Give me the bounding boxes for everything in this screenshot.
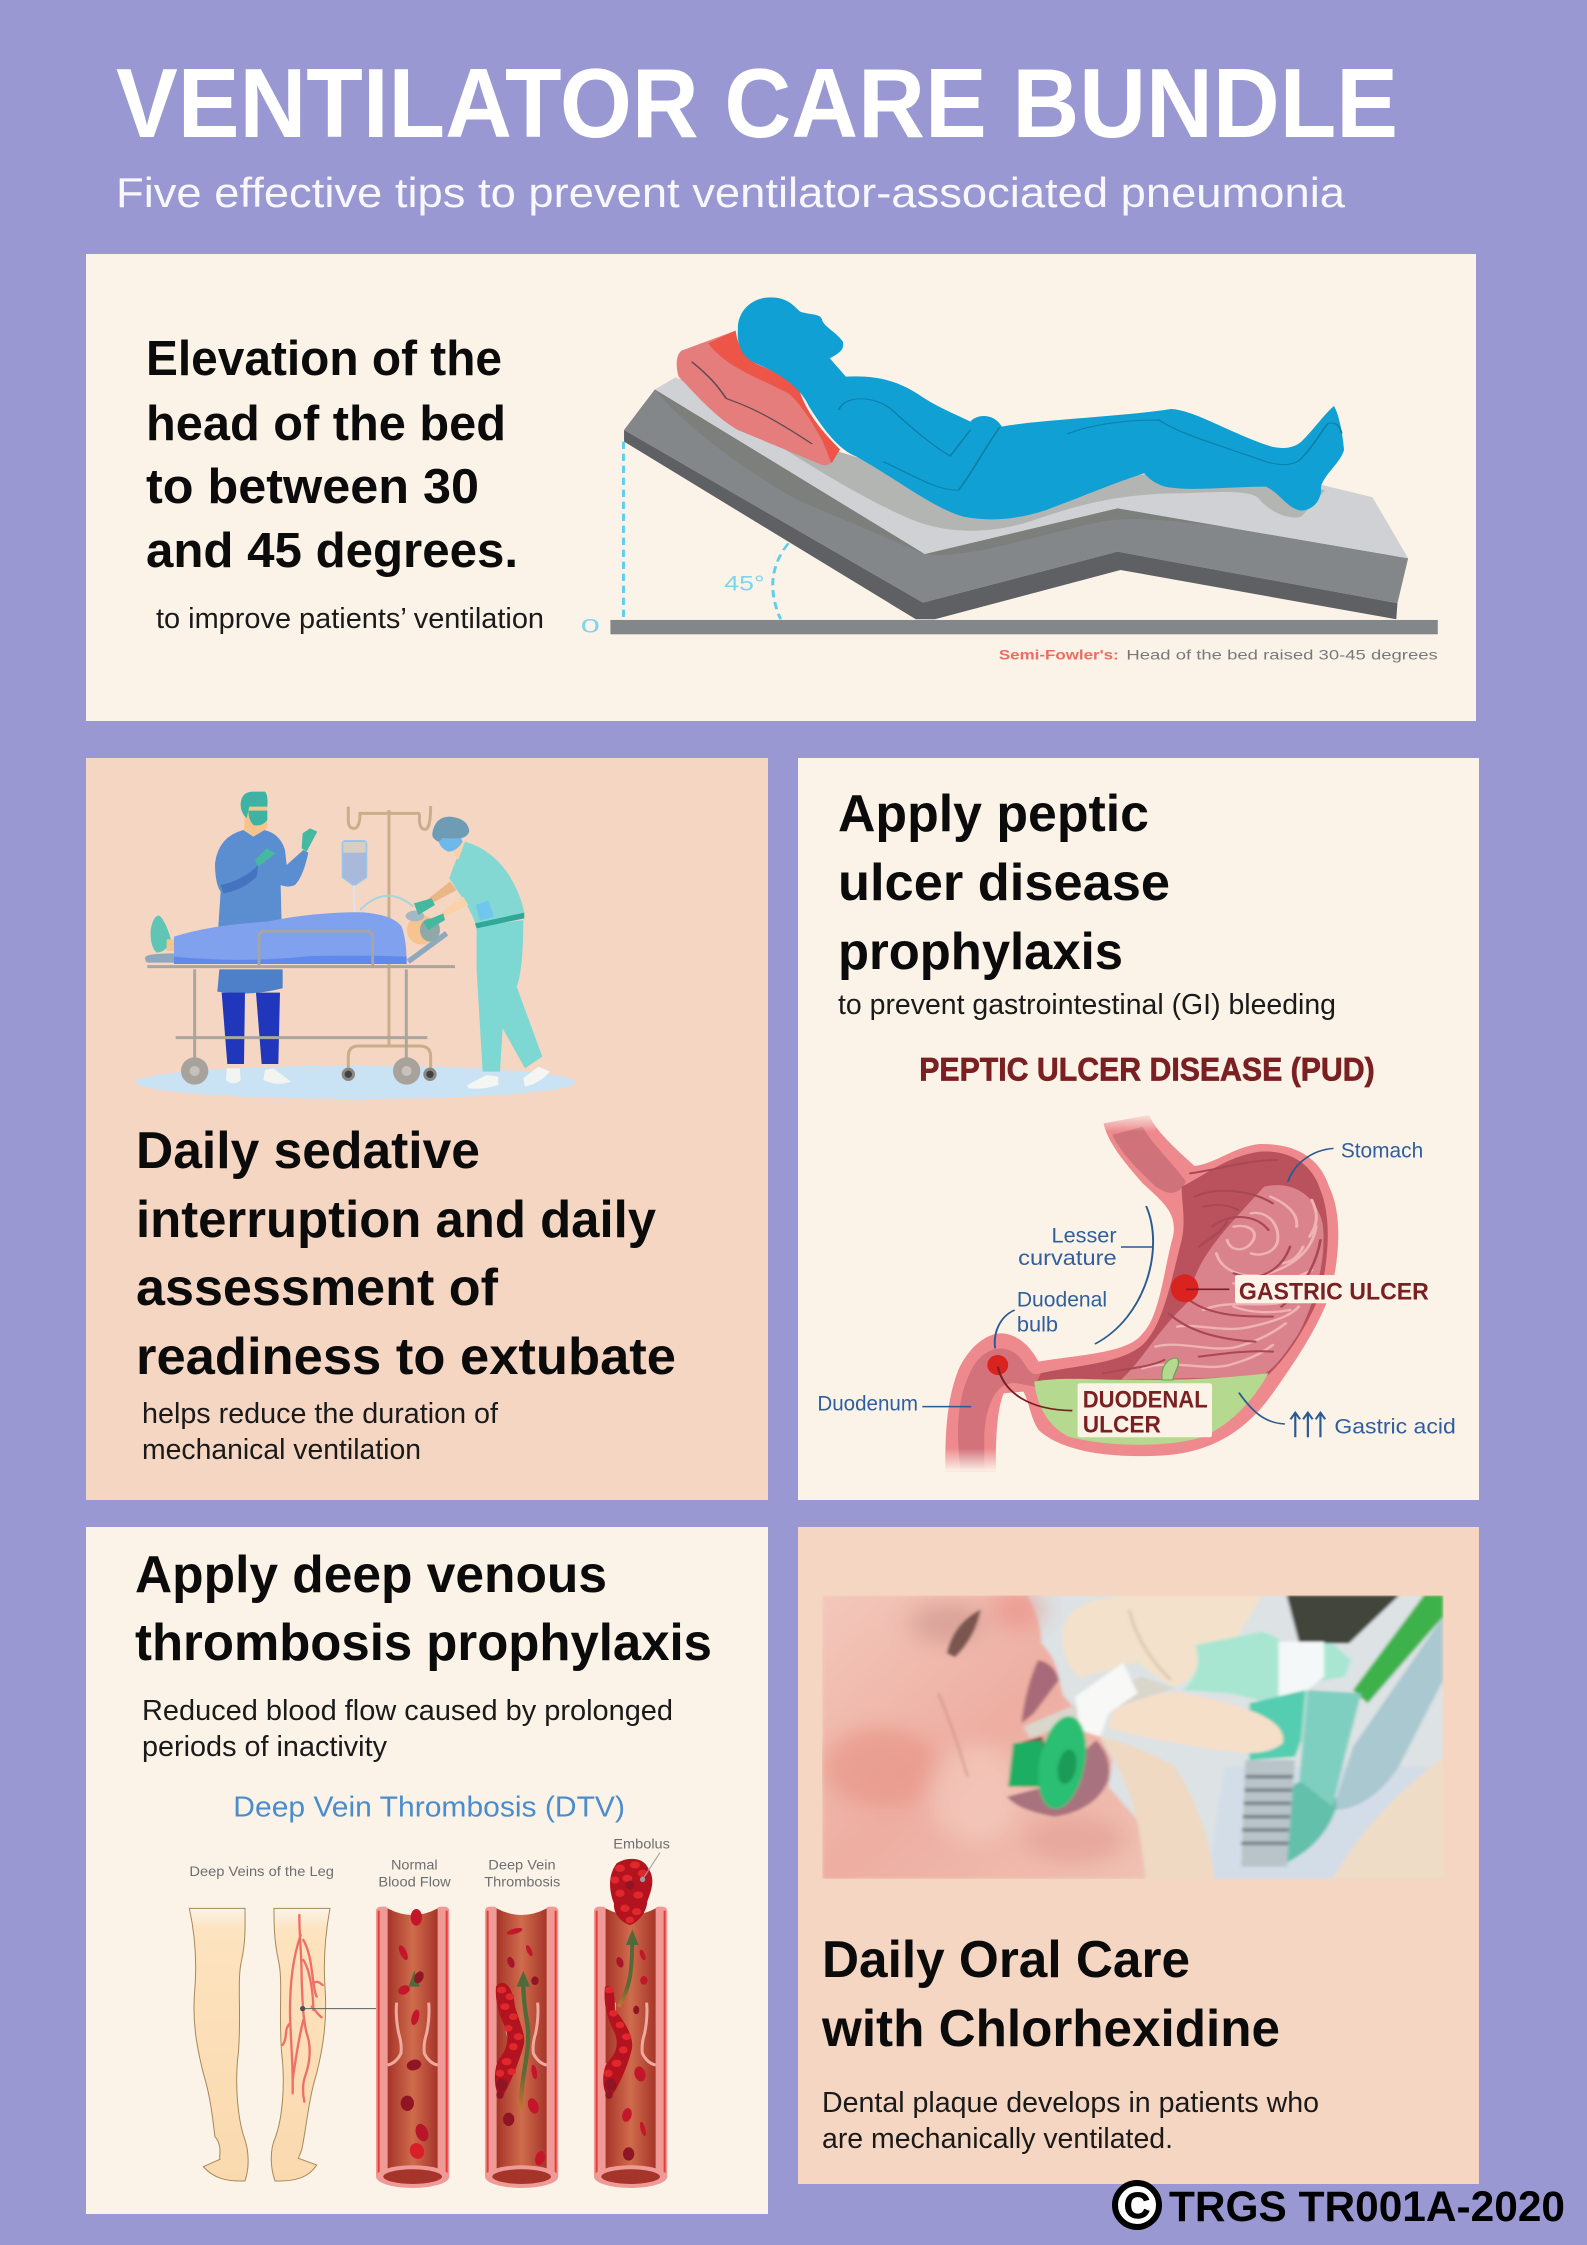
illustration: semi-Fowler bed — [581, 297, 1438, 663]
arrows: increased acid — [1291, 1413, 1325, 1437]
nurse — [414, 817, 550, 1089]
column labels: Deep Vein — [488, 1856, 556, 1872]
gastric ulcer spot — [1171, 1274, 1199, 1302]
heading: Apply deep venous — [135, 1546, 607, 1604]
supporting text — [142, 1695, 673, 1763]
lips — [1021, 1660, 1059, 1723]
panel: head of bed elevation — [86, 254, 1476, 721]
panel background — [86, 254, 1476, 721]
supporting text: mechanical ventilation — [142, 1434, 421, 1466]
caption — [999, 648, 1438, 663]
embolus mass — [610, 1859, 652, 1925]
heading: Apply peptic — [838, 785, 1149, 843]
duodenal ulcer label: DUODENAL — [1083, 1386, 1208, 1413]
heading: Elevation of the — [146, 332, 502, 386]
supporting text: Dental plaque develops in patients who — [822, 2087, 1319, 2119]
copyright footer — [1115, 2183, 1565, 2231]
anatomy labels: Duodenum — [817, 1393, 918, 1416]
dashed height and angle guides — [623, 442, 788, 619]
stretcher with patient — [145, 911, 455, 1085]
icon: copyright circle: C — [1124, 2185, 1150, 2226]
illustration title: PEPTIC ULCER DISEASE (PUD) — [919, 1052, 1375, 1088]
anatomy labels: Lesser — [1052, 1225, 1117, 1248]
angle label: 45° — [724, 571, 765, 595]
heading: head of the bed — [146, 397, 506, 451]
callout line — [303, 2007, 381, 2010]
clot — [495, 1983, 524, 2098]
IV bag — [342, 841, 367, 912]
photo background — [1028, 1596, 1444, 1854]
patient silhouette — [738, 297, 1344, 519]
anatomy labels: bulb — [1017, 1314, 1058, 1337]
illustration: clinicians at patient bedside — [136, 792, 576, 1099]
heading: prophylaxis — [838, 923, 1123, 981]
gloved hands — [1062, 1596, 1262, 1687]
endotracheal tube — [1024, 1677, 1175, 1738]
pillow — [677, 331, 840, 465]
panel background — [86, 1527, 768, 2214]
supporting text: to prevent gastrointestinal (GI) bleeding — [838, 989, 1336, 1021]
photo: oral care with ventilator tube — [822, 1590, 1443, 1879]
duodenal ulcer label — [998, 1367, 1212, 1438]
duodenal ulcer label: ULCER — [1083, 1411, 1161, 1438]
column labels: Embolus — [613, 1835, 670, 1851]
illustration: stomach with ulcers — [817, 1052, 1456, 1472]
title: VENTILATOR CARE BUNDLE — [116, 48, 1398, 158]
supporting text: helps reduce the duration of — [142, 1398, 499, 1430]
clear hose — [1332, 1617, 1443, 1810]
panel: deep venous thrombosis prophylaxis — [86, 1527, 768, 2214]
body shadow — [679, 378, 1325, 531]
gauze — [1075, 1663, 1138, 1737]
anatomy callout lines — [922, 1148, 1333, 1424]
finger over tube — [1109, 1692, 1283, 1753]
left leg — [189, 1908, 248, 2181]
corrugated tube — [1241, 1760, 1295, 1867]
supporting text — [142, 1398, 499, 1466]
mattress underside — [624, 430, 1397, 619]
esophagus lining — [1112, 1127, 1186, 1193]
heading: readiness to extubate — [136, 1328, 676, 1386]
stomach wall — [945, 1115, 1338, 1472]
mattress top — [655, 377, 1408, 558]
anatomy labels — [817, 1139, 1456, 1438]
heading: with Chlorhexidine — [821, 2000, 1280, 2058]
document code: TRGS TR001A-2020 — [1169, 2183, 1565, 2231]
supporting text — [822, 2087, 1319, 2155]
heading: to between 30 — [146, 460, 479, 514]
column labels: Deep Veins of the Leg — [189, 1863, 334, 1879]
gastric ulcer label — [1186, 1275, 1429, 1304]
heading: Daily sedative — [136, 1122, 480, 1180]
gastric acid pool — [1034, 1373, 1268, 1445]
column labels: Thrombosis — [484, 1874, 560, 1890]
heading: and 45 degrees. — [146, 524, 518, 578]
heading — [821, 1931, 1280, 2058]
heading — [146, 332, 518, 578]
panel: daily sedative interruption — [86, 758, 768, 1500]
green corrugated hose — [1353, 1596, 1443, 1703]
duodenum lining — [958, 1349, 1041, 1470]
heading: thrombosis prophylaxis — [135, 1614, 712, 1672]
lighter mucosa — [1121, 1185, 1324, 1380]
heading: ulcer disease — [838, 854, 1170, 912]
floor pad — [136, 1066, 576, 1099]
column labels — [189, 1835, 670, 1890]
panel background — [798, 1527, 1479, 2184]
anatomy labels: Duodenal — [1017, 1289, 1107, 1312]
anatomy labels: curvature — [1018, 1247, 1117, 1270]
panel background — [86, 758, 768, 1500]
anatomy labels: Gastric acid — [1334, 1415, 1456, 1438]
column labels: Blood Flow — [378, 1874, 452, 1890]
teal connector — [1183, 1632, 1351, 1760]
heading: Daily Oral Care — [822, 1931, 1190, 1989]
nasolabial crease — [939, 1693, 968, 1777]
bed base — [610, 620, 1438, 634]
panel background — [798, 758, 1479, 1500]
IV pole — [348, 806, 431, 1072]
gastric folds — [1143, 1197, 1316, 1368]
illustration title: Deep Vein Thrombosis (DTV) — [233, 1792, 625, 1824]
zero label: 0 — [581, 615, 600, 637]
anatomy labels: Stomach — [1341, 1139, 1423, 1162]
supporting text: Reduced blood flow caused by prolonged — [142, 1695, 673, 1727]
mattress side — [624, 389, 1408, 603]
vein: normal blood flow — [376, 1907, 449, 2188]
doctor — [215, 792, 317, 1084]
panel: daily oral care — [798, 1527, 1479, 2184]
panel: peptic ulcer prophylaxis — [798, 758, 1479, 1500]
column labels: Normal — [391, 1856, 438, 1872]
heading: assessment of — [136, 1259, 499, 1317]
right leg with veins — [271, 1908, 330, 2181]
vein: embolus — [594, 1853, 667, 2188]
stomach lining — [1034, 1152, 1328, 1387]
caption: Head of the bed raised 30-45 degrees — [1126, 648, 1438, 663]
green bite block — [1008, 1740, 1042, 1787]
tube end fades — [1099, 1112, 1156, 1132]
nostril — [947, 1609, 981, 1657]
supporting text: are mechanically ventilated. — [822, 2123, 1173, 2155]
heading — [136, 1122, 676, 1386]
caption: Semi-Fowler's: — [999, 648, 1119, 663]
patient face — [822, 1596, 1146, 1879]
illustration: deep vein thrombosis — [189, 1792, 670, 2188]
gastric ulcer label: GASTRIC ULCER — [1239, 1278, 1429, 1304]
subtitle: Five effective tips to prevent ventilator-associated pneumonia — [116, 169, 1346, 216]
supporting text: periods of inactivity — [142, 1731, 387, 1763]
supporting text: to improve patients’ ventilation — [156, 603, 544, 635]
duodenal ulcer spot — [987, 1355, 1008, 1375]
heading — [135, 1546, 712, 1672]
clot — [603, 1986, 632, 2098]
heading — [838, 785, 1170, 981]
vein: deep vein thrombosis — [485, 1907, 558, 2188]
icon: copyright circle — [1115, 2183, 1159, 2227]
heading: interruption and daily — [136, 1191, 656, 1249]
